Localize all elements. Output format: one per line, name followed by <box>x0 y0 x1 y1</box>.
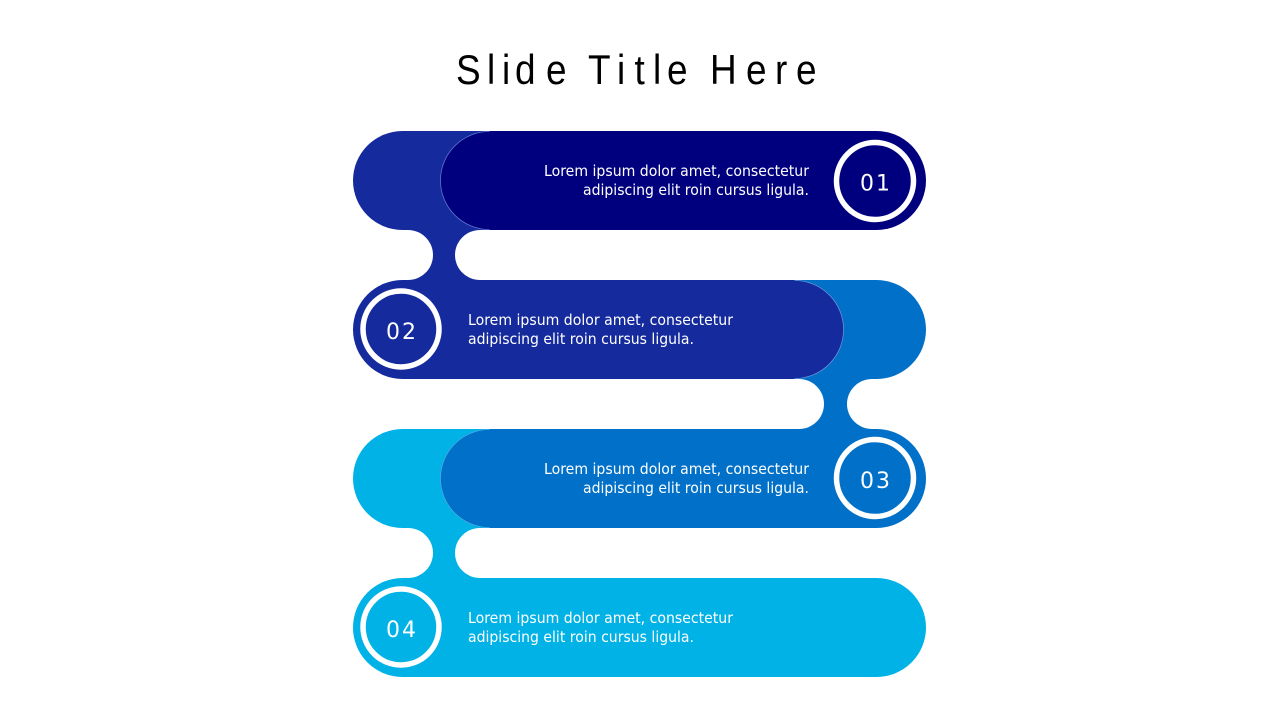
title: Slide Title Here <box>456 47 817 94</box>
badge ring 3 <box>836 440 914 516</box>
step 3 text <box>544 460 810 497</box>
step 2 text <box>468 311 734 348</box>
edge highlight 3 <box>440 429 490 528</box>
panel: step 3 band with connector <box>440 280 926 528</box>
step 2 text: adipiscing elit roin cursus ligula. <box>468 330 694 348</box>
step 4 text: Lorem ipsum dolor amet, consectetur <box>468 609 734 627</box>
step 3 text: adipiscing elit roin cursus ligula. <box>583 479 809 497</box>
step 1 number badge <box>836 142 914 220</box>
panel: step 1 band <box>440 131 926 230</box>
step 2 number badge <box>363 291 439 367</box>
step 4 text: adipiscing elit roin cursus ligula. <box>468 628 694 646</box>
band shape 2 <box>353 131 844 379</box>
step 4 text <box>468 609 734 646</box>
band shape 1 <box>440 131 926 230</box>
step 3 number badge <box>836 440 914 516</box>
step 4 number badge <box>363 589 439 665</box>
step 1 text: Lorem ipsum dolor amet, consectetur <box>544 162 810 180</box>
panel: step 2 band with connector <box>353 131 844 379</box>
number 04: 04 <box>386 618 416 643</box>
step 1 text <box>544 162 810 199</box>
badge ring 4 <box>363 589 439 665</box>
number 02: 02 <box>386 320 416 345</box>
band shape 3 <box>440 280 926 528</box>
band shape 4 <box>353 429 926 677</box>
number 03: 03 <box>860 469 890 494</box>
edge highlight 1 <box>440 131 490 230</box>
step 2 text: Lorem ipsum dolor amet, consectetur <box>468 311 734 329</box>
step 3 text: Lorem ipsum dolor amet, consectetur <box>544 460 810 478</box>
edge highlight 2 <box>794 280 844 379</box>
number 01: 01 <box>860 172 890 196</box>
step 1 text: adipiscing elit roin cursus ligula. <box>583 181 809 199</box>
badge ring 2 <box>363 291 439 367</box>
badge ring 1 <box>836 142 914 220</box>
panel: step 4 band with connector <box>353 429 926 677</box>
